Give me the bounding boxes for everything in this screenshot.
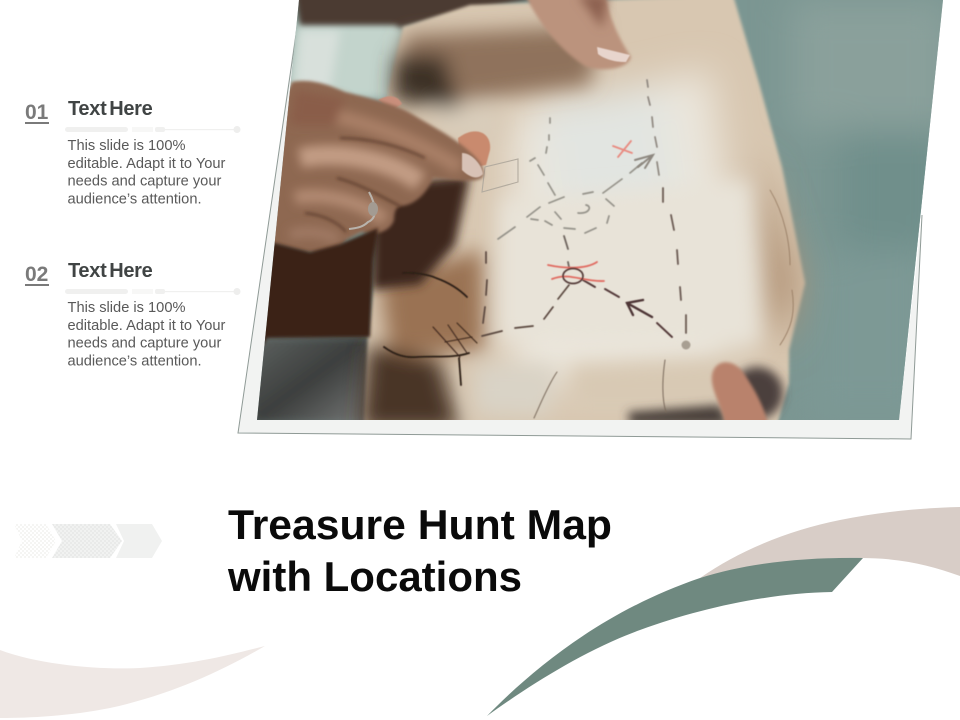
title: Treasure Hunt Map [228, 501, 612, 548]
title [227, 501, 612, 600]
light central routes [498, 118, 642, 239]
ring [349, 192, 378, 229]
swoosh: beige [700, 507, 960, 578]
body text 02: audience’s attention. [68, 354, 202, 370]
left hand with ring [262, 81, 490, 252]
treasure X marks [548, 141, 690, 350]
body text 02: needs and capture your [68, 336, 221, 352]
map cracks [384, 190, 793, 418]
arrows on the map [627, 155, 653, 317]
heading 01: Text Here [68, 98, 153, 120]
item 01 [25, 98, 240, 208]
title: with Locations [227, 553, 522, 600]
body text 02: editable. Adapt it to Your [68, 318, 226, 334]
body text 01 [68, 138, 226, 208]
photo: treasure map held in hands [250, 0, 950, 430]
parchment shading [510, 70, 800, 385]
top hand [525, 0, 631, 69]
dashed treasure routes [482, 80, 686, 337]
nail [462, 153, 483, 177]
bottom thumb [712, 362, 768, 425]
number 01: 01 [25, 101, 49, 124]
right route [647, 80, 659, 175]
body text 02 [68, 300, 226, 370]
divider 01 [65, 126, 240, 133]
photo background [250, 0, 950, 425]
body text 01: audience’s attention. [68, 192, 202, 208]
photo frame [238, 0, 922, 439]
blurred shirt at left [250, 20, 405, 425]
finger highlights [290, 90, 460, 240]
finger creases [305, 138, 425, 232]
body text 01: needs and capture your [68, 174, 221, 190]
chevron arrows [14, 524, 162, 558]
swoosh: bottom-left [0, 646, 265, 718]
divider 02 [65, 288, 240, 295]
parchment map [360, 0, 805, 430]
body text 02: This slide is 100% [68, 300, 186, 316]
swoosh: green [487, 558, 863, 716]
heading 02: Text Here [68, 260, 153, 282]
number 02: 02 [25, 263, 48, 286]
sketch house [482, 159, 518, 192]
item 02 [25, 260, 240, 370]
body text 01: This slide is 100% [68, 138, 186, 154]
body text 01: editable. Adapt it to Your [68, 156, 226, 172]
dark sleeve [250, 228, 378, 345]
hand base [262, 81, 484, 252]
lower routes [482, 252, 569, 336]
